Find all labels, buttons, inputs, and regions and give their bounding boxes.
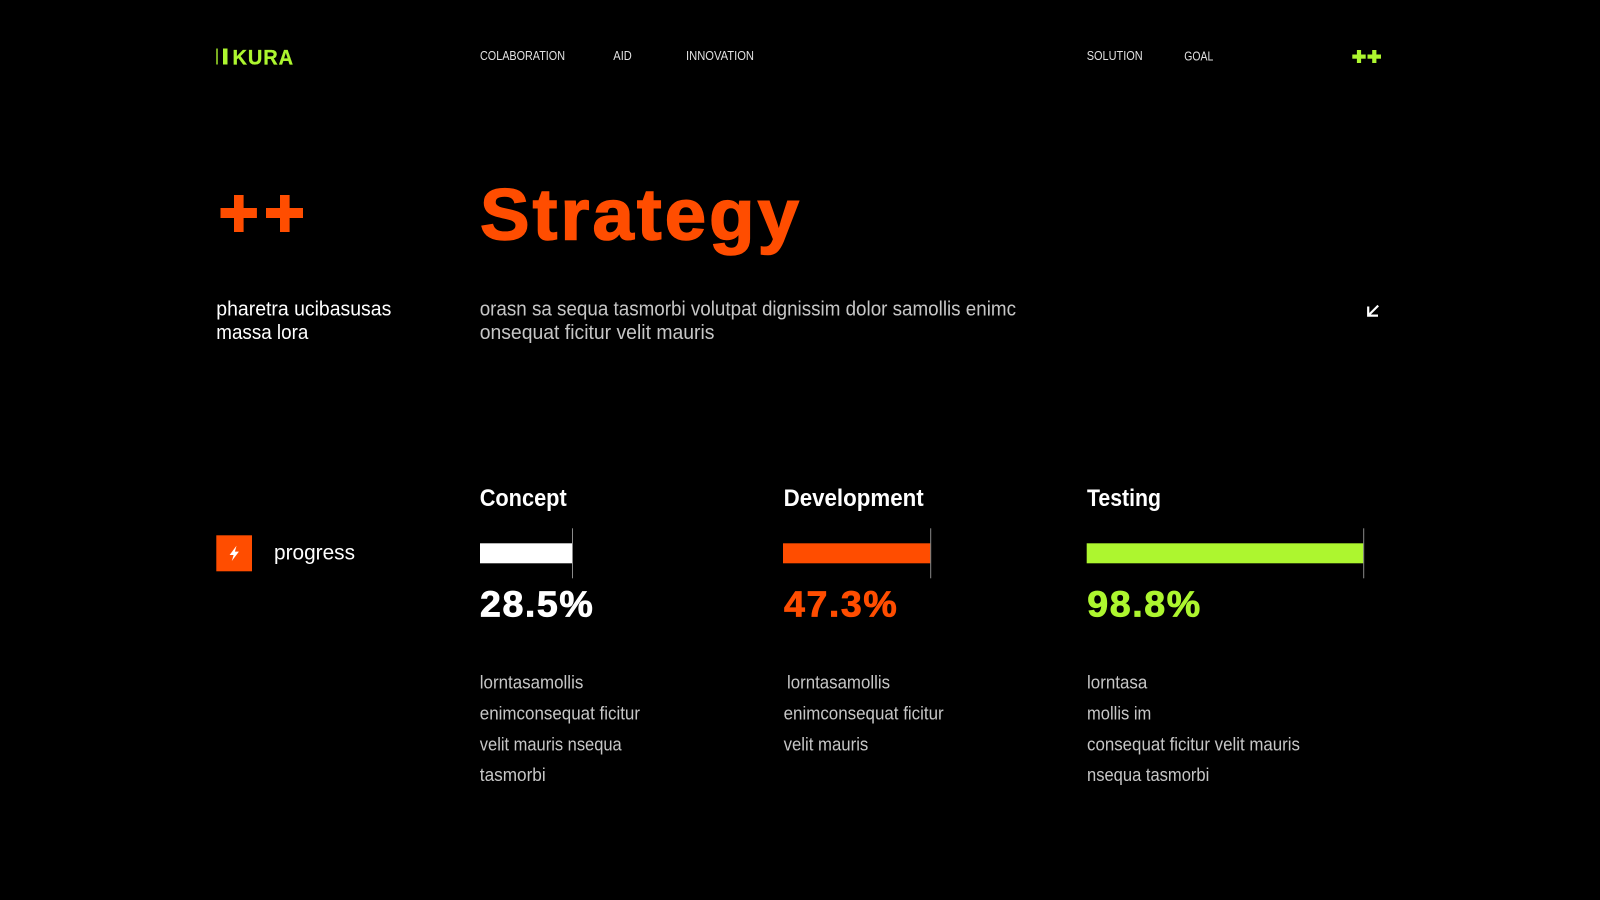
value: development: 47.3% [784, 584, 898, 625]
text block: testing [1087, 673, 1300, 785]
top navigation: GOAL [1184, 50, 1213, 64]
icon: lightning bolt [216, 535, 252, 571]
text block: concept: tasmorbi [480, 765, 546, 785]
icon: green double plus [1352, 50, 1381, 63]
value: concept: 28.5% [480, 584, 594, 625]
text block: testing: nsequa tasmorbi [1087, 765, 1209, 785]
panel: testing [1087, 485, 1364, 785]
description text: onsequat ficitur velit mauris [480, 322, 714, 344]
description text [480, 298, 1016, 344]
logo: KURA: KURA [232, 45, 294, 69]
text block: concept: velit mauris nsequa [480, 734, 623, 754]
panel: concept [480, 485, 640, 785]
progress bar: concept [480, 528, 573, 578]
text block: development: enimconsequat ficitur [784, 704, 944, 724]
text block: development: lorntasamollis [787, 673, 890, 693]
top navigation: AID [613, 49, 632, 63]
icon: orange double plus [220, 195, 303, 232]
label: progress: progress [274, 541, 355, 564]
value: testing: 98.8% [1087, 584, 1202, 625]
top navigation: SOLUTION [1087, 49, 1143, 63]
top navigation: COLABORATION [480, 49, 565, 63]
text block: testing: lorntasa [1087, 673, 1148, 693]
progress label with icon [216, 535, 355, 571]
text block: concept: enimconsequat ficitur [480, 704, 640, 724]
top navigation [480, 49, 1213, 64]
text block: testing: consequat ficitur velit mauris [1087, 734, 1300, 754]
text block: development: velit mauris [784, 734, 868, 754]
heading: testing: Testing [1087, 485, 1161, 512]
text block: testing: mollis im [1087, 704, 1151, 724]
text block: concept: lorntasamollis [480, 673, 583, 693]
icon: diagonal arrow [1368, 306, 1378, 316]
subtitle left [216, 298, 391, 344]
heading: development: Development [784, 485, 924, 512]
title: Strategy [480, 176, 802, 256]
description text: orasn sa sequa tasmorbi volutpat dignissim dolor samollis enimc [480, 298, 1016, 320]
heading: concept: Concept [480, 485, 567, 512]
text block: development [784, 673, 944, 754]
text block: concept [480, 673, 640, 785]
panel: development [783, 485, 944, 754]
subtitle left: pharetra ucibasusas [216, 298, 391, 320]
top navigation: INNOVATION [686, 49, 754, 63]
subtitle left: massa lora [216, 322, 309, 344]
progress bar: development [783, 528, 931, 578]
progress bar: testing [1087, 528, 1364, 578]
